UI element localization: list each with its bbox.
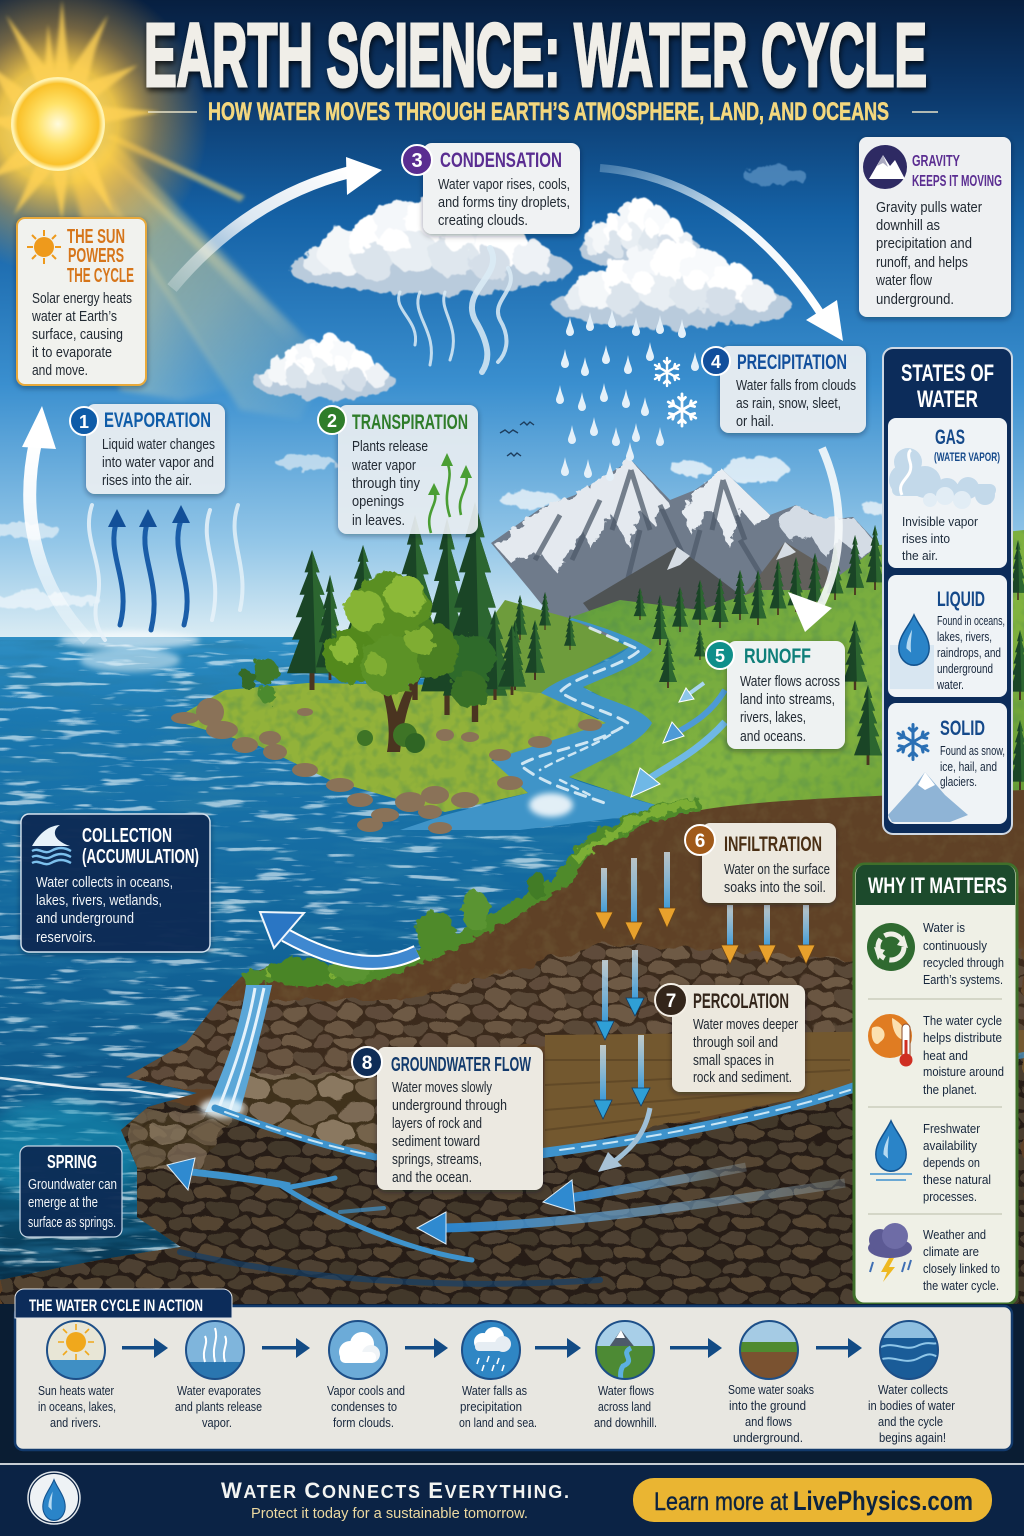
panel: why it matters: recycled through: [923, 956, 1004, 970]
panel: why it matters: heat and: [923, 1049, 968, 1063]
step 3: clouds: condenses to: [331, 1400, 397, 1414]
panel: spring: Groundwater can: [28, 1177, 117, 1193]
step 6: soil: underground.: [733, 1431, 803, 1445]
panel: the sun powers the cycle: surface, causing: [32, 327, 123, 343]
ocean: [0, 631, 700, 1302]
distant wispy clouds: [0, 167, 889, 609]
panel: gravity keeps it moving: water flow: [875, 273, 932, 289]
panel: precipitation: [702, 346, 866, 433]
transpiration arrows: [428, 453, 472, 533]
green valley behind the island: [440, 592, 629, 693]
panel: why it matters: moisture around: [923, 1065, 1004, 1079]
step 7: ocean: [868, 1320, 955, 1445]
panel: evaporation: rises into the air.: [102, 473, 192, 489]
panel: groundwater flow: underground through: [392, 1098, 507, 1114]
panel: gravity keeps it moving: precipitation and: [876, 236, 972, 252]
waterfall: [200, 985, 272, 1118]
panel: condensation: creating clouds.: [438, 213, 528, 229]
icon: recycle: [867, 923, 915, 971]
step 3: clouds: [327, 1320, 405, 1430]
panel: why it matters: climate are: [923, 1245, 979, 1259]
step 4: rain: on land and sea.: [459, 1416, 537, 1430]
panel: infiltration: 6: [695, 831, 705, 852]
groundwater streams: [180, 1055, 1024, 1284]
panel: why it matters: Earth’s systems.: [923, 973, 1003, 987]
panel: transpiration: through tiny: [352, 476, 421, 492]
island with forest: [170, 502, 610, 834]
panel: why it matters: the planet.: [923, 1083, 977, 1097]
panel: collection: reservoirs.: [36, 930, 96, 946]
panel: why it matters: Water is: [923, 921, 965, 935]
panel: infiltration: [685, 823, 836, 903]
step 6: soil: and flows: [745, 1415, 792, 1429]
icon: water drop: [870, 1121, 912, 1180]
panel: evaporation: EVAPORATION: [104, 409, 211, 432]
panel: gravity keeps it moving: GRAVITY: [912, 153, 960, 170]
panel: gravity keeps it moving: downhill as: [876, 218, 940, 234]
step 2: evaporation: [175, 1320, 262, 1430]
panel: collection: and underground: [36, 911, 134, 927]
panel: collection: [21, 814, 210, 952]
sun with rays and light beams: [0, 0, 330, 420]
footer: Protect it today for a sustainable tomorrow.: [251, 1505, 528, 1522]
panel: the sun powers the cycle: [17, 218, 146, 385]
panel: groundwater flow: and the ocean.: [392, 1170, 472, 1186]
panel: the sun powers the cycle: Solar energy heats: [32, 291, 132, 307]
card: liquid: underground: [937, 662, 993, 676]
panel: states of water: WATER: [917, 386, 978, 413]
panel: spring: SPRING: [47, 1152, 97, 1172]
card: gas: rises into: [902, 531, 950, 546]
panel: groundwater flow: layers of rock and: [392, 1116, 482, 1132]
card: gas: [888, 418, 1007, 568]
panel: the sun powers the cycle: water at Earth’s: [31, 309, 117, 325]
panel: precipitation: Water falls from clouds: [736, 378, 856, 394]
footer: [0, 1463, 1024, 1536]
arrow: [535, 1338, 581, 1358]
panel: runoff: and oceans.: [740, 729, 806, 745]
step 5: mountain river: across land: [598, 1400, 651, 1414]
step 1: sun heats water: Sun heats water: [38, 1384, 114, 1398]
step 6: soil: into the ground: [729, 1399, 806, 1413]
panel: precipitation: PRECIPITATION: [737, 351, 847, 374]
panel: why it matters: the water cycle.: [923, 1279, 999, 1293]
collection arrow: [260, 912, 417, 962]
arrow: [122, 1338, 168, 1358]
panel: groundwater flow: sediment toward: [392, 1134, 480, 1150]
panel: evaporation: Liquid water changes: [102, 437, 215, 453]
card: gas: Invisible vapor: [902, 514, 979, 529]
panel: spring: emerge at the: [28, 1195, 98, 1211]
runoff arrows: [631, 683, 725, 797]
panel: transpiration: openings: [352, 494, 404, 510]
step 3: clouds: form clouds.: [333, 1416, 394, 1430]
step 5: mountain river: and downhill.: [594, 1416, 657, 1430]
panel: gravity keeps it moving: underground.: [876, 292, 954, 308]
panel: precipitation: or hail.: [736, 414, 774, 430]
panel: condensation: 3: [411, 150, 423, 172]
card: solid: [888, 703, 1007, 824]
card: liquid: raindrops, and: [937, 646, 1001, 660]
panel: transpiration: 2: [327, 411, 337, 431]
step 2: evaporation: vapor.: [202, 1416, 232, 1430]
panel: why it matters: depends on: [923, 1156, 980, 1170]
panel: why it matters: closely linked to: [923, 1262, 1000, 1276]
panel: evaporation: into water vapor and: [102, 455, 214, 471]
panel: transpiration: in leaves.: [352, 513, 405, 529]
step 4: rain: precipitation: [460, 1400, 522, 1414]
panel: infiltration: soaks into the soil.: [724, 880, 826, 896]
step 7: ocean: begins again!: [879, 1431, 946, 1445]
tab heading: THE WATER CYCLE IN ACTION: [29, 1296, 203, 1315]
rain and snow: [556, 309, 699, 481]
panel: the water cycle in action: [15, 1289, 1012, 1450]
panel: why it matters: these natural: [923, 1173, 991, 1187]
panel: gravity keeps it moving: runoff, and helps: [876, 255, 968, 271]
panel: groundwater flow: Water moves slowly: [392, 1080, 493, 1096]
percolation arrows: [594, 950, 650, 1119]
infiltration arrows: [595, 852, 815, 964]
button: learn more: [633, 1478, 992, 1522]
step 1: sun heats water: and rivers.: [50, 1416, 101, 1430]
panel: the sun powers the cycle: and move.: [32, 363, 88, 379]
panel: groundwater flow: springs, streams,: [392, 1152, 482, 1168]
panel: the sun powers the cycle: THE CYCLE: [67, 265, 134, 287]
step 1: sun heats water: in oceans, lakes,: [38, 1400, 116, 1414]
evaporation arrows: [89, 505, 243, 640]
panel: runoff: land into streams,: [740, 692, 835, 708]
panel: condensation: CONDENSATION: [440, 149, 562, 172]
step 4: rain: [459, 1320, 537, 1430]
step 7: ocean: in bodies of water: [868, 1399, 955, 1413]
panel: precipitation: as rain, snow, sleet,: [736, 396, 841, 412]
icon: storm cloud: [868, 1223, 912, 1282]
arrow: [262, 1338, 310, 1358]
step 5: mountain river: [594, 1320, 657, 1430]
panel: why it matters: helps distribute: [923, 1031, 1002, 1045]
panel: the sun powers the cycle: POWERS: [68, 245, 124, 267]
panel: spring: [20, 1146, 122, 1237]
panel: spring: surface as springs.: [28, 1215, 116, 1231]
sky background: [0, 0, 1024, 640]
step 4: rain: Water falls as: [462, 1384, 527, 1398]
step 7: ocean: Water collects: [878, 1383, 948, 1397]
panel: condensation: and forms tiny droplets,: [438, 195, 570, 211]
panel: evaporation: [70, 404, 225, 494]
panel: groundwater flow: [352, 1047, 543, 1190]
panel: precipitation: 4: [711, 352, 721, 372]
panel: the sun powers the cycle: THE SUN: [67, 226, 125, 248]
panel: infiltration: INFILTRATION: [724, 833, 822, 856]
panel: why it matters: continuously: [923, 939, 988, 953]
panel: groundwater flow: GROUNDWATER FLOW: [391, 1054, 531, 1076]
panel: collection: Water collects in oceans,: [36, 875, 173, 891]
card: liquid: lakes, rivers,: [937, 630, 992, 644]
panel: percolation: 7: [666, 991, 676, 1012]
icon: footer drop badge: [28, 1472, 80, 1524]
step 6: soil: Some water soaks: [728, 1383, 814, 1397]
groundwater flow arrows: [167, 1108, 845, 1244]
grass edge: [245, 803, 700, 986]
panel: runoff: Water flows across: [740, 674, 840, 690]
panel: percolation: [655, 984, 805, 1092]
icon: waves: [32, 825, 71, 864]
panel: collection: lakes, rivers, wetlands,: [36, 893, 162, 909]
panel: infiltration: Water on the surface: [724, 862, 830, 878]
panel: why it matters: processes.: [923, 1190, 977, 1204]
mountains: [491, 460, 885, 640]
icon: mountain gravity: [863, 145, 907, 189]
panel: runoff: RUNOFF: [744, 645, 811, 668]
card: solid: SOLID: [940, 717, 985, 740]
panel: why it matters: The water cycle: [923, 1014, 1002, 1028]
panel: transpiration: water vapor: [351, 458, 416, 474]
arrow: [670, 1338, 722, 1358]
panel: groundwater flow: 8: [362, 1053, 372, 1074]
card: solid: glaciers.: [940, 775, 977, 789]
button: learn more: LivePhysics.com: [793, 1486, 973, 1516]
panel: evaporation: 1: [79, 412, 89, 432]
card: liquid: LIQUID: [937, 588, 985, 611]
step 7: ocean: and the cycle: [878, 1415, 943, 1429]
panel: why it matters: Weather and: [923, 1228, 986, 1242]
step 3: clouds: Vapor cools and: [327, 1384, 405, 1398]
panel: transpiration: TRANSPIRATION: [352, 411, 468, 434]
icon: sun: [27, 230, 61, 264]
arrow: [405, 1338, 448, 1358]
card: solid: ice, hail, and: [940, 760, 997, 774]
river: [400, 618, 679, 830]
panel: why it matters: [854, 864, 1017, 1304]
panel: runoff: [706, 641, 845, 749]
panel: collection: COLLECTION: [82, 825, 172, 847]
birds: [500, 422, 534, 456]
bottom dark band: [0, 1304, 1024, 1464]
panel: condensation: [402, 143, 580, 234]
panel: gravity keeps it moving: [859, 137, 1011, 317]
ground cross-section with rock layers: [0, 790, 1024, 1310]
panel: percolation: Water moves deeper: [693, 1017, 798, 1033]
card: gas: GAS: [935, 426, 965, 449]
panel: why it matters: availability: [923, 1139, 978, 1153]
panel: transpiration: Plants release: [352, 439, 428, 455]
step 2: evaporation: and plants release: [175, 1400, 262, 1414]
panel: percolation: rock and sediment.: [693, 1070, 792, 1086]
panel: runoff: 5: [715, 646, 725, 666]
panel: percolation: PERCOLATION: [693, 990, 789, 1013]
panel: condensation: Water vapor rises, cools,: [438, 177, 570, 193]
panel: why it matters: Freshwater: [923, 1122, 980, 1136]
panel: runoff: rivers, lakes,: [740, 710, 806, 726]
panel: transpiration: [318, 405, 478, 534]
step 1: sun heats water: [38, 1320, 116, 1430]
panel: states of water: [883, 348, 1012, 834]
panel: gravity keeps it moving: Gravity pulls water: [876, 200, 982, 216]
clouds: [253, 194, 792, 399]
panel: the sun powers the cycle: it to evaporate: [32, 345, 112, 361]
footer: WATER CONNECTS EVERYTHING.: [221, 1478, 569, 1503]
panel: percolation: through soil and: [693, 1035, 778, 1051]
card: gas: the air.: [902, 548, 938, 563]
button: learn more: Learn more at: [654, 1488, 788, 1516]
panel: percolation: small spaces in: [693, 1053, 774, 1069]
big cycle arrows: [22, 157, 843, 640]
arrow: [816, 1338, 862, 1358]
shoreline rocks: [171, 698, 602, 834]
step 5: mountain river: Water flows: [598, 1384, 654, 1398]
card: liquid: water.: [936, 678, 964, 692]
step 2: evaporation: Water evaporates: [177, 1384, 261, 1398]
icon: globe and thermometer: [868, 1014, 912, 1066]
panel: collection: (ACCUMULATION): [82, 846, 199, 868]
step 6: soil: [728, 1320, 814, 1445]
right hills: [560, 525, 1024, 820]
card: liquid: [888, 575, 1007, 697]
condensation vapor wisps: [399, 248, 511, 372]
tab heading: [15, 1289, 232, 1318]
